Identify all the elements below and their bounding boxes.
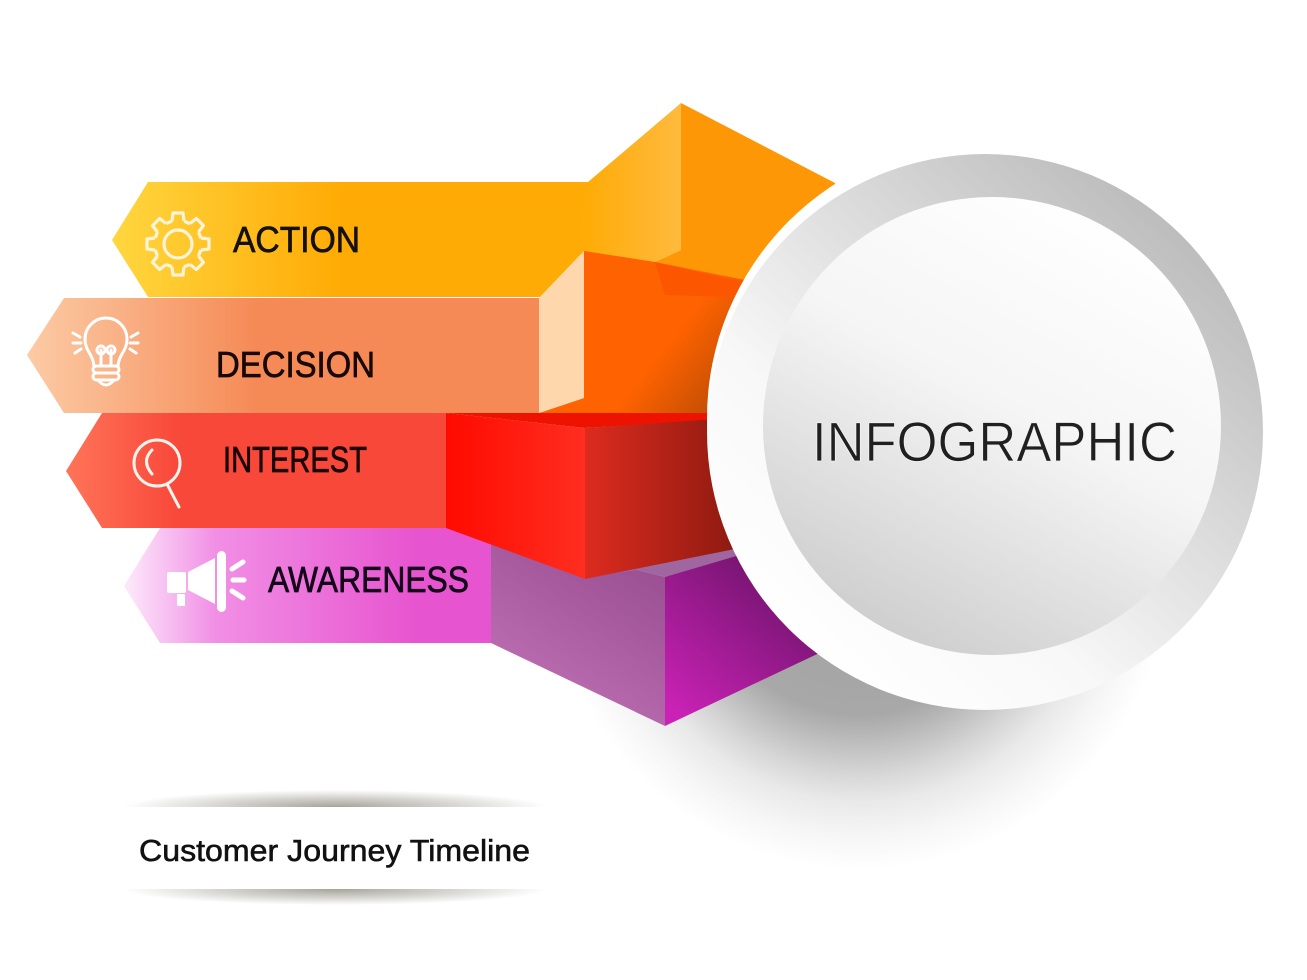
awareness block front face [665,552,830,726]
icon: magnifier [134,440,180,507]
panel: interest step [66,413,750,579]
decision block dark face [539,251,760,420]
decision block fold [655,262,755,297]
decision arrow banner [27,298,539,413]
shadow band below caption [140,889,530,904]
panel: awareness step [124,528,830,726]
awareness block top highlight [600,540,750,577]
caption text: Customer Journey Timeline [139,833,530,868]
circle drop shadow [550,250,1170,870]
decision block light face [539,251,584,413]
label: awareness: AWARENESS [268,559,469,600]
caption group [140,792,530,904]
label: decision: DECISION [216,344,375,385]
action block right face [655,103,835,310]
panel: decision step [27,251,760,420]
label: interest: INTEREST [223,439,367,480]
action block light face [580,103,681,275]
interest block left face [446,413,585,579]
circle white halo [707,140,1263,696]
action arrow banner [112,182,588,297]
interest block top strip [446,413,745,428]
circle outer ring [707,154,1263,710]
interest block right face [585,417,750,579]
awareness block side face [491,530,665,726]
panel: action step [112,103,835,310]
icon: megaphone [167,551,244,612]
circle inner face [763,197,1221,655]
label: action: ACTION [233,219,360,260]
awareness arrow banner [124,528,491,643]
panel: central circle [707,140,1263,710]
circle title: INFOGRAPHIC [812,410,1177,473]
shadow band above caption [140,792,530,807]
interest arrow banner [66,413,446,528]
icon: gear [147,213,209,275]
icon: light bulb [73,318,138,385]
infographic canvas [27,103,1263,904]
